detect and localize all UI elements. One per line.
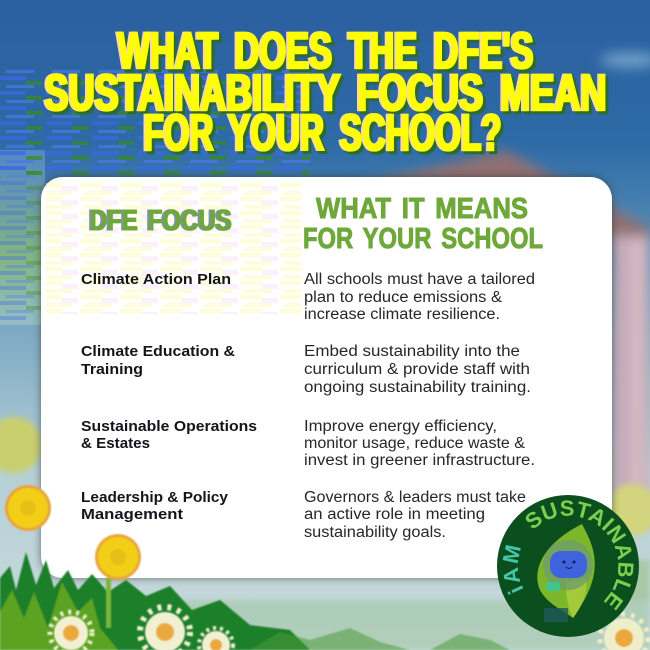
heading: what it means for your school: FOR YOUR SCHOOL xyxy=(303,223,543,255)
row 1 meaning: All schools must have a tailored xyxy=(304,271,535,288)
badge text: iAM: iAM xyxy=(502,545,524,595)
icon: yellow flower centre xyxy=(95,534,141,628)
row 1 meaning: increase climate resilience. xyxy=(304,306,500,323)
row 2 meaning: ongoing sustainability training. xyxy=(304,379,531,396)
row 4 focus xyxy=(81,489,229,523)
row 4 meaning: sustainability goals. xyxy=(304,524,446,541)
heading: what it means for your school: WHAT IT MEANS xyxy=(316,193,528,225)
row 3 meaning: monitor usage, reduce waste & xyxy=(304,435,526,452)
background: blurred meadow xyxy=(0,417,650,650)
background: compression artefact blocks xyxy=(0,70,310,325)
badge disc xyxy=(497,495,639,637)
row 2 meaning: Embed sustainability into the xyxy=(304,343,520,360)
row 1 meaning: plan to reduce emissions & xyxy=(304,289,503,306)
icon: daisy 3 xyxy=(199,628,233,650)
title xyxy=(45,22,607,161)
row 2 meaning: curriculum & provide staff with xyxy=(304,361,530,378)
row 1 meaning xyxy=(304,271,535,323)
panel compression artefacts xyxy=(46,182,301,314)
heading: DfE focus: DFE FOCUS xyxy=(90,205,232,237)
illustration: grass xyxy=(0,552,510,650)
heading: what it means for your school xyxy=(303,193,543,255)
icon: daisy 4 xyxy=(600,614,648,650)
row 2 focus: Climate Education & xyxy=(81,343,235,360)
row 2 focus xyxy=(81,343,235,378)
row 1 focus: Climate Action Plan xyxy=(81,271,231,288)
row 3 meaning: Improve energy efficiency, xyxy=(304,418,497,435)
icon: daisy 2 xyxy=(140,607,190,650)
row 3 meaning: invest in greener infrastructure. xyxy=(304,452,535,469)
panel: comparison table xyxy=(41,177,612,578)
leaf character xyxy=(537,524,595,622)
icon: yellow flower left xyxy=(5,485,51,531)
row 2 focus: Training xyxy=(81,361,143,378)
badge text: SUSTAINABLE: SUSTAINABLE xyxy=(526,500,634,610)
row 4 meaning xyxy=(304,489,526,541)
row 3 focus xyxy=(81,418,257,452)
row 3 focus: & Estates xyxy=(81,435,150,452)
background: blurred school building xyxy=(340,52,650,526)
row 4 focus: Management xyxy=(81,506,183,523)
row 4 focus: Leadership & Policy xyxy=(81,489,229,506)
row 3 focus: Sustainable Operations xyxy=(81,418,257,435)
logo: I AM Sustainable badge xyxy=(497,495,639,637)
row 4 meaning: Governors & leaders must take xyxy=(304,489,526,506)
panel background xyxy=(41,177,612,578)
row 4 meaning: an active role in meeting xyxy=(304,506,485,523)
icon: daisy 1 xyxy=(50,612,92,650)
row 2 meaning xyxy=(304,343,531,396)
row 3 meaning xyxy=(304,418,535,469)
